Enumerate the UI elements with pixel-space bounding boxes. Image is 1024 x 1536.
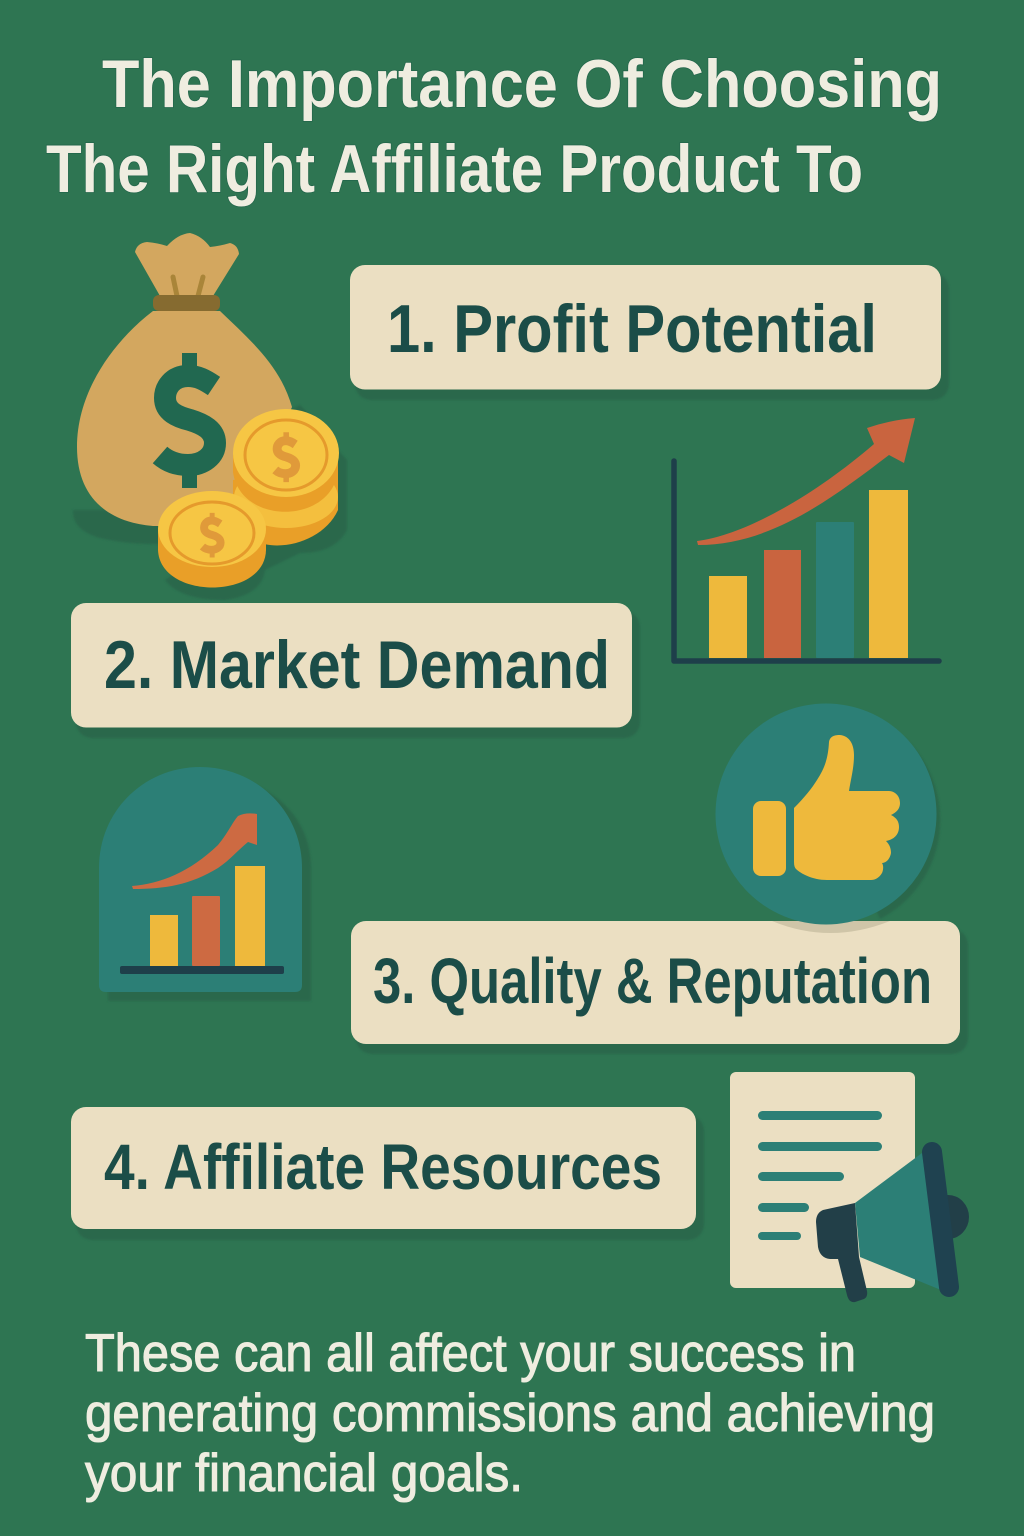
closing text: your financial goals.: [85, 1444, 523, 1503]
closing text: generating commissions and achieving: [85, 1384, 935, 1443]
icon: document with megaphone: [730, 1072, 969, 1302]
icon: thumbs up badge: [716, 704, 940, 933]
title: [46, 46, 942, 207]
panel: 4. Affiliate Resources: 4. Affiliate Resources: [104, 1131, 662, 1203]
icon: coin stack: [233, 409, 339, 545]
panel: 3. Quality & Reputation: [351, 921, 968, 1054]
title: The Importance Of Choosing: [102, 46, 942, 122]
panel: 2. Market Demand: 2. Market Demand: [104, 627, 610, 703]
icon: dollar sign on bag: [160, 353, 215, 488]
icon: rising bar chart: [674, 418, 939, 661]
panel: 1. Profit Potential: 1. Profit Potential: [387, 291, 877, 367]
panel: 2. Market Demand: [71, 603, 640, 738]
panel: 1. Profit Potential: [350, 265, 949, 400]
closing text: [85, 1324, 935, 1503]
icon: money bag with coins: [73, 233, 347, 600]
panel: 4. Affiliate Resources: [71, 1107, 704, 1240]
closing text: These can all affect your success in: [85, 1324, 856, 1383]
title: The Right Affiliate Product To: [46, 131, 863, 207]
icon: growth chart arch card: [99, 767, 311, 1001]
icon: front coin: [158, 491, 266, 588]
